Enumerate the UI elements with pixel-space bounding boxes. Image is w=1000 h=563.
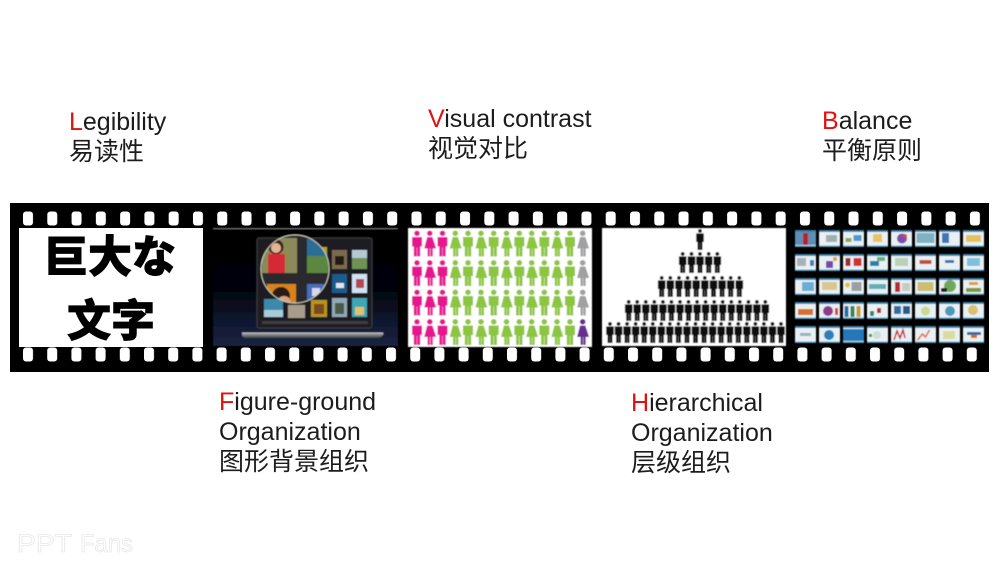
green group <box>450 230 575 345</box>
label: legibility: Legibility <box>69 108 167 136</box>
label: figure-ground organization: Figure-ground <box>219 388 376 416</box>
toolbar <box>262 321 368 324</box>
pyramid level 3 <box>658 276 743 297</box>
people rows <box>412 230 589 345</box>
thumbnail row 1 <box>795 230 984 247</box>
thumbnail row 3 <box>795 278 984 295</box>
giant text line 2: 文字 <box>67 297 155 346</box>
label: hierarchical organization: 层级组织 <box>631 449 731 477</box>
pyramid level 2 <box>679 252 721 273</box>
label: figure-ground organization: Organization <box>219 418 361 446</box>
panel: legibility giant text <box>19 228 203 347</box>
pyramid level 5 <box>606 322 785 343</box>
label: legibility: 易读性 <box>69 138 144 166</box>
panel: hierarchical pyramid <box>602 228 786 346</box>
label: visual contrast: 视觉对比 <box>428 135 528 163</box>
bottom sprocket holes <box>20 348 988 362</box>
pyramid level 4 <box>625 300 769 321</box>
panel: figure-ground laptop <box>213 228 398 346</box>
pyramid level 1 <box>696 229 704 250</box>
label: balance <box>822 107 922 165</box>
magenta group <box>412 230 448 345</box>
label: visual contrast: Visual contrast <box>428 105 592 133</box>
label: hierarchical organization <box>631 389 773 477</box>
label: hierarchical organization: Hierarchical <box>631 389 763 417</box>
label: figure-ground organization: 图形背景组织 <box>219 448 369 476</box>
thumbnail row 4 <box>795 302 984 319</box>
top sprocket holes <box>20 212 988 226</box>
giant text line 1: 巨大な <box>44 233 176 282</box>
watermark: PPT <box>17 530 72 558</box>
film strip <box>10 203 989 372</box>
photo thumbnails <box>264 247 367 318</box>
grey group <box>577 230 589 316</box>
laptop base <box>242 332 384 338</box>
label: balance: 平衡原则 <box>822 137 922 165</box>
label: legibility <box>69 108 167 166</box>
watermark <box>17 530 133 558</box>
magnifier lens <box>261 235 329 310</box>
label: hierarchical organization: Organization <box>631 419 773 447</box>
thumbnail row 5 <box>795 326 984 343</box>
pyramid people <box>606 229 785 343</box>
label: balance: Balance <box>822 107 912 135</box>
purple highlighted figure <box>577 319 589 345</box>
watermark: Fans <box>80 530 133 558</box>
panel: balance slide thumbnails <box>795 230 984 343</box>
label: visual contrast <box>428 105 592 163</box>
thumbnail row 2 <box>795 254 984 271</box>
laptop screen <box>257 238 372 328</box>
panel: visual contrast pictogram <box>408 228 592 347</box>
label: figure-ground organization <box>219 388 376 476</box>
